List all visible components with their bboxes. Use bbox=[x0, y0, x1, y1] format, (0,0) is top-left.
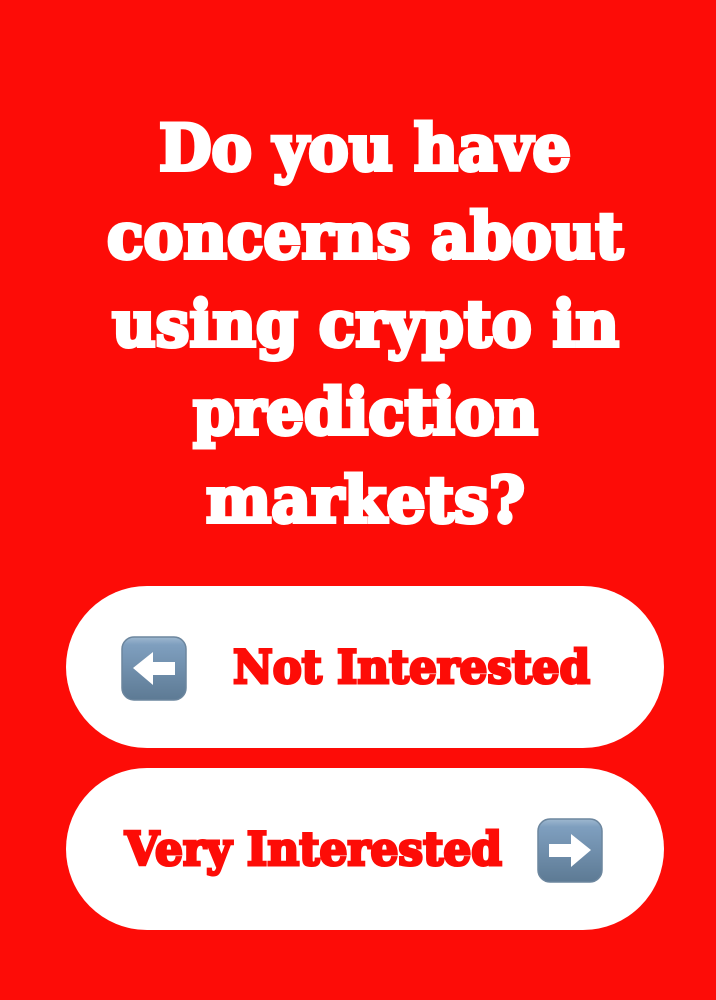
title: using crypto in bbox=[112, 287, 619, 362]
icon: right arrow bbox=[538, 819, 602, 882]
button: very interested bbox=[66, 768, 664, 930]
title: Do you have bbox=[159, 111, 571, 186]
title: concerns about bbox=[107, 199, 623, 274]
label: not interested: Not Interested bbox=[233, 640, 590, 694]
title: markets? bbox=[206, 463, 525, 538]
label: very interested: Very Interested bbox=[124, 822, 502, 876]
button: not interested bbox=[66, 586, 664, 748]
title: prediction bbox=[193, 375, 538, 450]
icon: left arrow bbox=[122, 637, 186, 700]
title bbox=[107, 111, 623, 538]
